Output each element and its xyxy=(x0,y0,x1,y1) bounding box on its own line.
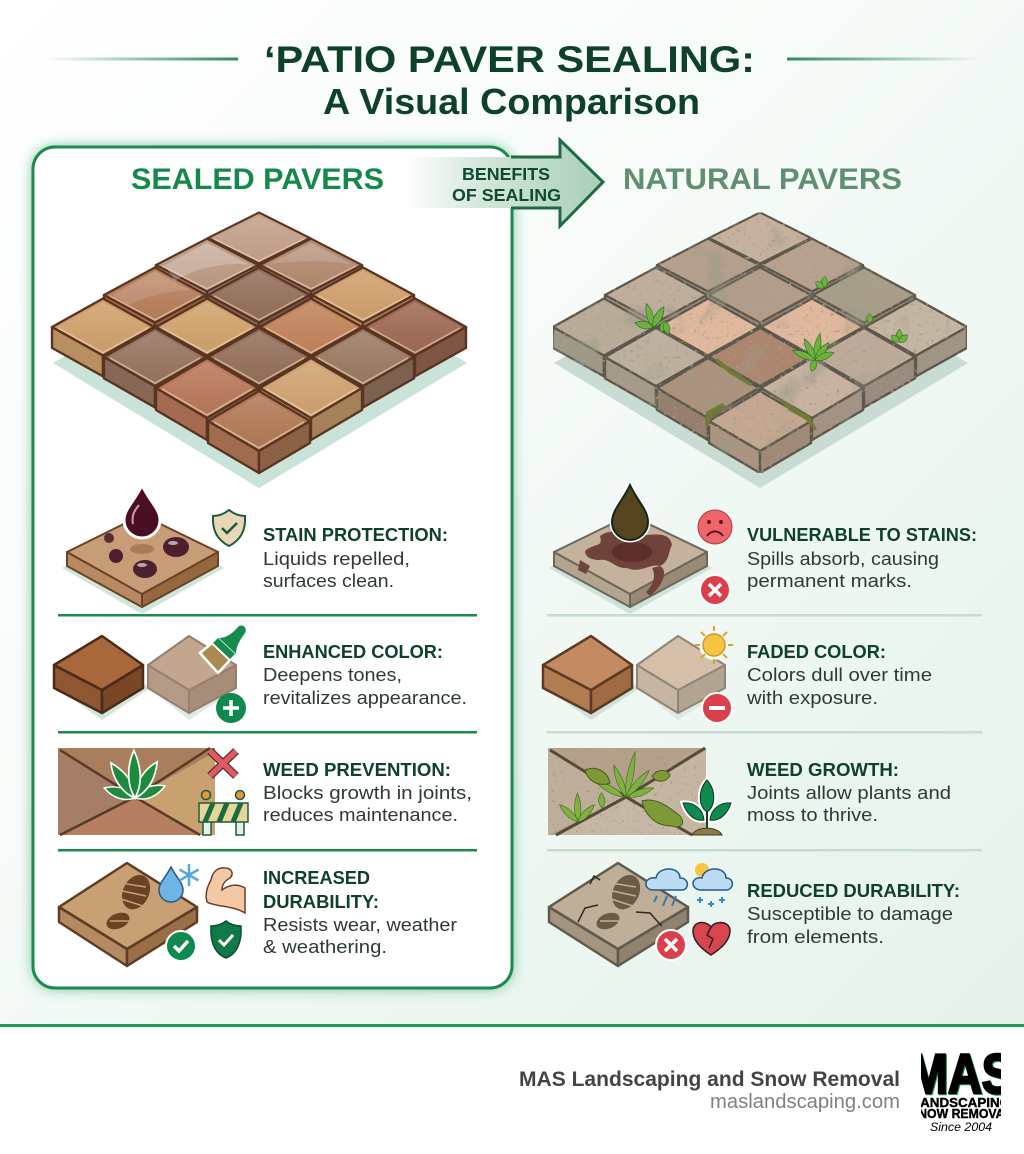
text: faded color xyxy=(746,641,932,708)
text: weed prevention: Blocks growth in joints, xyxy=(263,782,472,803)
text: enhanced color: revitalizes appearance. xyxy=(263,687,467,708)
icon: shield xyxy=(213,510,245,546)
text: increased durability: Resists wear, weather xyxy=(263,914,457,935)
arrow: benefits of sealing xyxy=(404,140,603,226)
icon: stained natural paver xyxy=(549,485,712,614)
text: reduced durability: REDUCED DURABILITY: xyxy=(747,880,960,901)
text: weed growth: Joints allow plants and xyxy=(747,782,951,803)
text: stain protection: STAIN PROTECTION: xyxy=(263,524,448,545)
arrow: benefits of sealing: OF SEALING xyxy=(452,185,561,205)
row: stain protection xyxy=(62,485,448,614)
text: stain protection xyxy=(263,524,448,591)
icon: faded blocks with sun xyxy=(541,626,733,723)
icon: durable paver with boot print xyxy=(59,863,198,966)
text: weed prevention: reduces maintenance. xyxy=(263,804,458,825)
icon: cracked paver with boot print xyxy=(549,863,688,966)
text: vulnerable to stains: Spills absorb, causing xyxy=(747,548,939,569)
text: vulnerable to stains: permanent marks. xyxy=(747,570,912,591)
text: reduced durability xyxy=(747,880,960,947)
text: stain protection: surfaces clean. xyxy=(263,570,394,591)
logo: LANDSCAPING xyxy=(912,1095,1010,1110)
title: A Visual Comparison xyxy=(323,81,700,122)
row: weed growth xyxy=(548,748,951,835)
row: weed prevention xyxy=(58,748,472,835)
row: reduced durability xyxy=(549,863,960,966)
icon: x badge xyxy=(656,930,686,960)
text: increased durability: & weathering. xyxy=(263,936,387,957)
text: weed prevention: WEED PREVENTION: xyxy=(263,759,451,780)
icon: flexed arm xyxy=(206,868,245,913)
row: faded color xyxy=(541,626,932,723)
heading: sealed pavers: SEALED PAVERS xyxy=(131,163,384,196)
text: faded color: with exposure. xyxy=(746,687,878,708)
icon: broken heart xyxy=(693,922,730,955)
text: enhanced color xyxy=(263,641,467,708)
title xyxy=(45,39,980,122)
icon: sealed and unsealed blocks with brush xyxy=(52,626,246,723)
title: ‘PATIO PAVER SEALING: xyxy=(264,39,755,80)
logo xyxy=(921,1052,1001,1131)
icon: seedling xyxy=(683,780,731,835)
icon: water beading on sealed paver xyxy=(62,485,224,614)
illustration: natural paver grid xyxy=(553,212,968,488)
row: vulnerable to stains xyxy=(549,485,977,614)
arrow: benefits of sealing: BENEFITS xyxy=(462,164,550,184)
text: enhanced color: ENHANCED COLOR: xyxy=(263,641,443,662)
illustration: sealed paver grid xyxy=(52,212,467,488)
heading: natural pavers: NATURAL PAVERS xyxy=(623,163,902,196)
icon: joints with weeds and moss xyxy=(548,748,706,835)
footer xyxy=(0,1024,1024,1131)
text: weed growth xyxy=(747,759,951,825)
row: increased durability xyxy=(59,863,457,966)
logo: Since 2004 xyxy=(930,1120,992,1134)
text: weed growth: moss to thrive. xyxy=(747,804,878,825)
icon: sad face xyxy=(698,510,732,544)
text: increased durability: DURABILITY: xyxy=(263,891,379,912)
weeds and moss on natural pavers xyxy=(634,276,910,430)
text: reduced durability: from elements. xyxy=(747,926,884,947)
row: enhanced color xyxy=(52,626,467,723)
text: increased durability: INCREASED xyxy=(263,867,370,888)
text: weed prevention xyxy=(263,759,472,825)
company name: MAS Landscaping and Snow Removal xyxy=(519,1068,900,1091)
text: increased durability xyxy=(263,867,457,957)
text: reduced durability: Susceptible to damage xyxy=(747,903,953,924)
text: vulnerable to stains: VULNERABLE TO STAINS: xyxy=(747,524,977,545)
text: enhanced color: Deepens tones, xyxy=(263,664,402,685)
text: faded color: FADED COLOR: xyxy=(747,641,886,662)
panel: sealed pavers xyxy=(33,147,512,988)
text: weed growth: WEED GROWTH: xyxy=(747,759,899,780)
text: vulnerable to stains xyxy=(747,524,977,591)
text: faded color: Colors dull over time xyxy=(747,664,932,685)
icon: sun and snow cloud xyxy=(693,863,732,907)
website: maslandscaping.com xyxy=(710,1091,900,1113)
icon: sealed joint with blocked weed xyxy=(58,748,248,835)
logo: SNOW REMOVAL xyxy=(910,1107,1012,1121)
icon: x badge xyxy=(700,575,730,605)
text: stain protection: Liquids repelled, xyxy=(263,548,410,569)
icon: rain cloud xyxy=(646,869,687,906)
icon: green shield xyxy=(211,921,241,958)
